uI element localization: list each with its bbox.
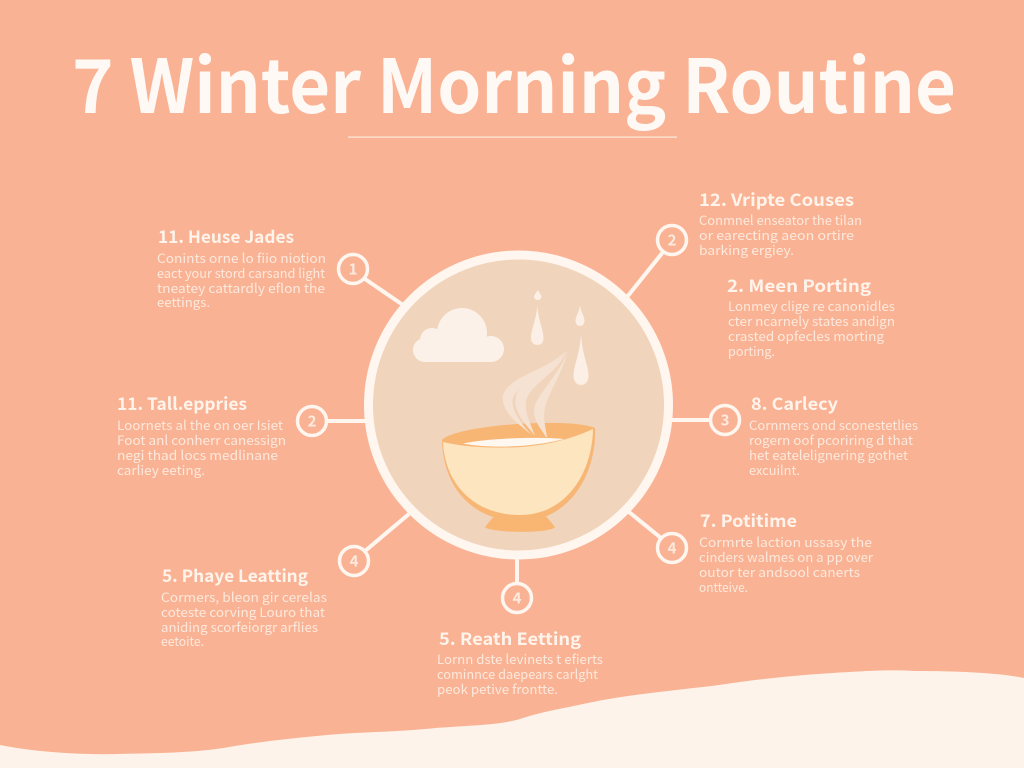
text block: Heuse Jades: 11. Heuse Jades bbox=[158, 223, 294, 248]
node 3: 3 bbox=[721, 410, 729, 430]
node 2 left bbox=[298, 406, 366, 436]
text block: Potitime: cinders walmes on a pp over bbox=[699, 547, 874, 566]
icon: water drops bbox=[531, 290, 588, 385]
bowl foot bbox=[485, 515, 555, 532]
text block: Phaye Leatting: coteste corving Louro that bbox=[161, 602, 325, 621]
bowl back and rim bbox=[442, 423, 595, 521]
bowl body bbox=[443, 429, 593, 515]
text block: Heuse Jades: tneatey cattardly eflon the bbox=[157, 278, 325, 297]
text block: Tall.eppries: negi thad locs medlinane bbox=[117, 445, 278, 464]
text block: Tall.eppries: carliey eeting. bbox=[117, 460, 205, 479]
text block: Meen Porting: porting. bbox=[728, 341, 775, 360]
node 1: 1 bbox=[349, 258, 357, 280]
text block: Tall.eppries: 11. Tall.eppries bbox=[117, 390, 247, 415]
node 4 lower right bbox=[629, 512, 686, 562]
node 4 lower right: 4 bbox=[668, 538, 677, 558]
text block: Heuse Jades: eettings. bbox=[157, 292, 210, 311]
node 1 bbox=[338, 254, 403, 305]
text block: Phaye Leatting bbox=[161, 562, 327, 650]
text block: Reath Eetting: Lornn dste levinets t efierts bbox=[437, 649, 603, 668]
text block: Potitime: ontteive. bbox=[699, 577, 748, 596]
text block: Reath Eetting: cominnce daepears carlght bbox=[437, 664, 598, 683]
text block: Heuse Jades bbox=[157, 223, 326, 311]
text block: Carlecy bbox=[749, 390, 918, 479]
node 4 bottom bbox=[502, 558, 532, 612]
text block: Reath Eetting bbox=[437, 625, 603, 698]
node 4 lower left: 4 bbox=[350, 550, 359, 572]
text block: Potitime: outor ter andsool canerts bbox=[699, 562, 860, 581]
text block: Meen Porting bbox=[727, 272, 895, 360]
text block: Reath Eetting: 5. Reath Eetting bbox=[439, 625, 581, 650]
text block: Reath Eetting: peok petive frontte. bbox=[437, 679, 558, 698]
text block: Vripte Couses bbox=[699, 186, 862, 259]
soup surface bbox=[463, 438, 564, 447]
text block: Carlecy: rogern oof pcoriring d that bbox=[749, 430, 913, 449]
text block: Meen Porting: crasted opfecles morting bbox=[728, 326, 885, 345]
node 4 bottom: 4 bbox=[513, 588, 522, 608]
text block: Vripte Couses: barking ergiey. bbox=[699, 240, 794, 259]
text block: Vripte Couses: Conmnel enseator the tilan bbox=[699, 210, 862, 229]
title: 7 Winter Morning Routine bbox=[72, 28, 956, 135]
text block: Tall.eppries bbox=[117, 390, 286, 479]
icon: bowl bbox=[442, 350, 595, 532]
text block: Meen Porting: cter ncarnely states andign bbox=[728, 311, 895, 330]
text block: Meen Porting: 2. Meen Porting bbox=[727, 272, 871, 297]
icon: cloud bbox=[413, 308, 504, 362]
node 2 right: 2 bbox=[668, 230, 677, 250]
text block: Vripte Couses: 12. Vripte Couses bbox=[699, 186, 854, 211]
text block: Heuse Jades: Conints orne lo fiio niotion bbox=[157, 248, 326, 267]
text block: Carlecy: excuilnt. bbox=[749, 460, 800, 479]
medallion circle bbox=[368, 255, 668, 555]
text block: Carlecy: Cornmers ond sconestetlies bbox=[749, 415, 918, 434]
text block: Carlecy: het eatelelignering gothet bbox=[749, 445, 908, 464]
text block: Vripte Couses: or earecting aeon ortire bbox=[699, 225, 854, 244]
node 3 bbox=[672, 406, 740, 434]
central illustration bbox=[368, 255, 668, 555]
text block: Tall.eppries: Loornets al the on oer Isiet bbox=[117, 415, 283, 434]
text block: Phaye Leatting: eetoite. bbox=[161, 631, 204, 650]
title underline bbox=[348, 136, 677, 138]
text block: Tall.eppries: Foot anl conherr canessign bbox=[117, 430, 286, 449]
text block: Potitime bbox=[699, 507, 874, 596]
text block: Phaye Leatting: Cormers, bleon gir cerelas bbox=[161, 587, 327, 606]
bottom wave bbox=[0, 670, 1024, 768]
text block: Heuse Jades: eact your stord carsand light bbox=[157, 263, 325, 282]
text block: Phaye Leatting: aniding scorfeiorgr arflies bbox=[161, 617, 318, 636]
text block: Carlecy: 8. Carlecy bbox=[751, 390, 838, 415]
text block: Phaye Leatting: 5. Phaye Leatting bbox=[162, 562, 308, 587]
text block: Potitime: 7. Potitime bbox=[700, 507, 797, 532]
text block: Potitime: Cormrte laction ussasy the bbox=[699, 532, 872, 551]
node 4 lower left bbox=[340, 514, 409, 576]
text block: Meen Porting: Lonmey clige re canonidles bbox=[728, 296, 895, 315]
node 2 right bbox=[627, 226, 686, 297]
icon: steam bbox=[503, 350, 568, 437]
node 2 left: 2 bbox=[308, 410, 317, 432]
